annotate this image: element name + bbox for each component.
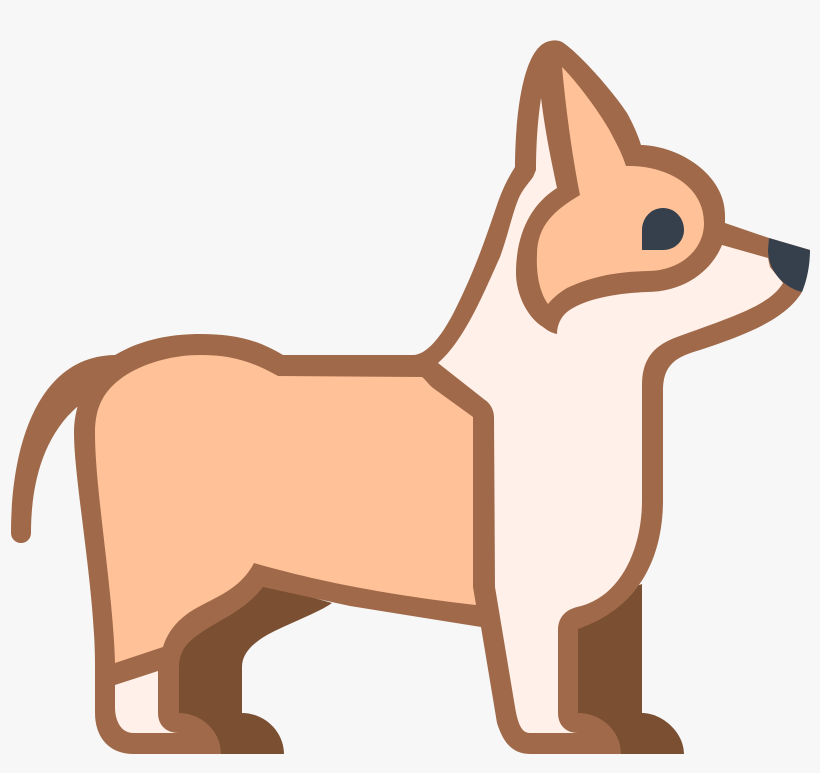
chest, neck and ear window (438, 98, 783, 733)
body fill (95, 355, 476, 663)
head and ear fill (537, 67, 704, 304)
far legs (170, 580, 684, 754)
rear paw cream (115, 671, 179, 733)
tail (11, 355, 120, 543)
nose (768, 238, 810, 292)
eye (642, 208, 684, 250)
head outline (516, 150, 725, 334)
